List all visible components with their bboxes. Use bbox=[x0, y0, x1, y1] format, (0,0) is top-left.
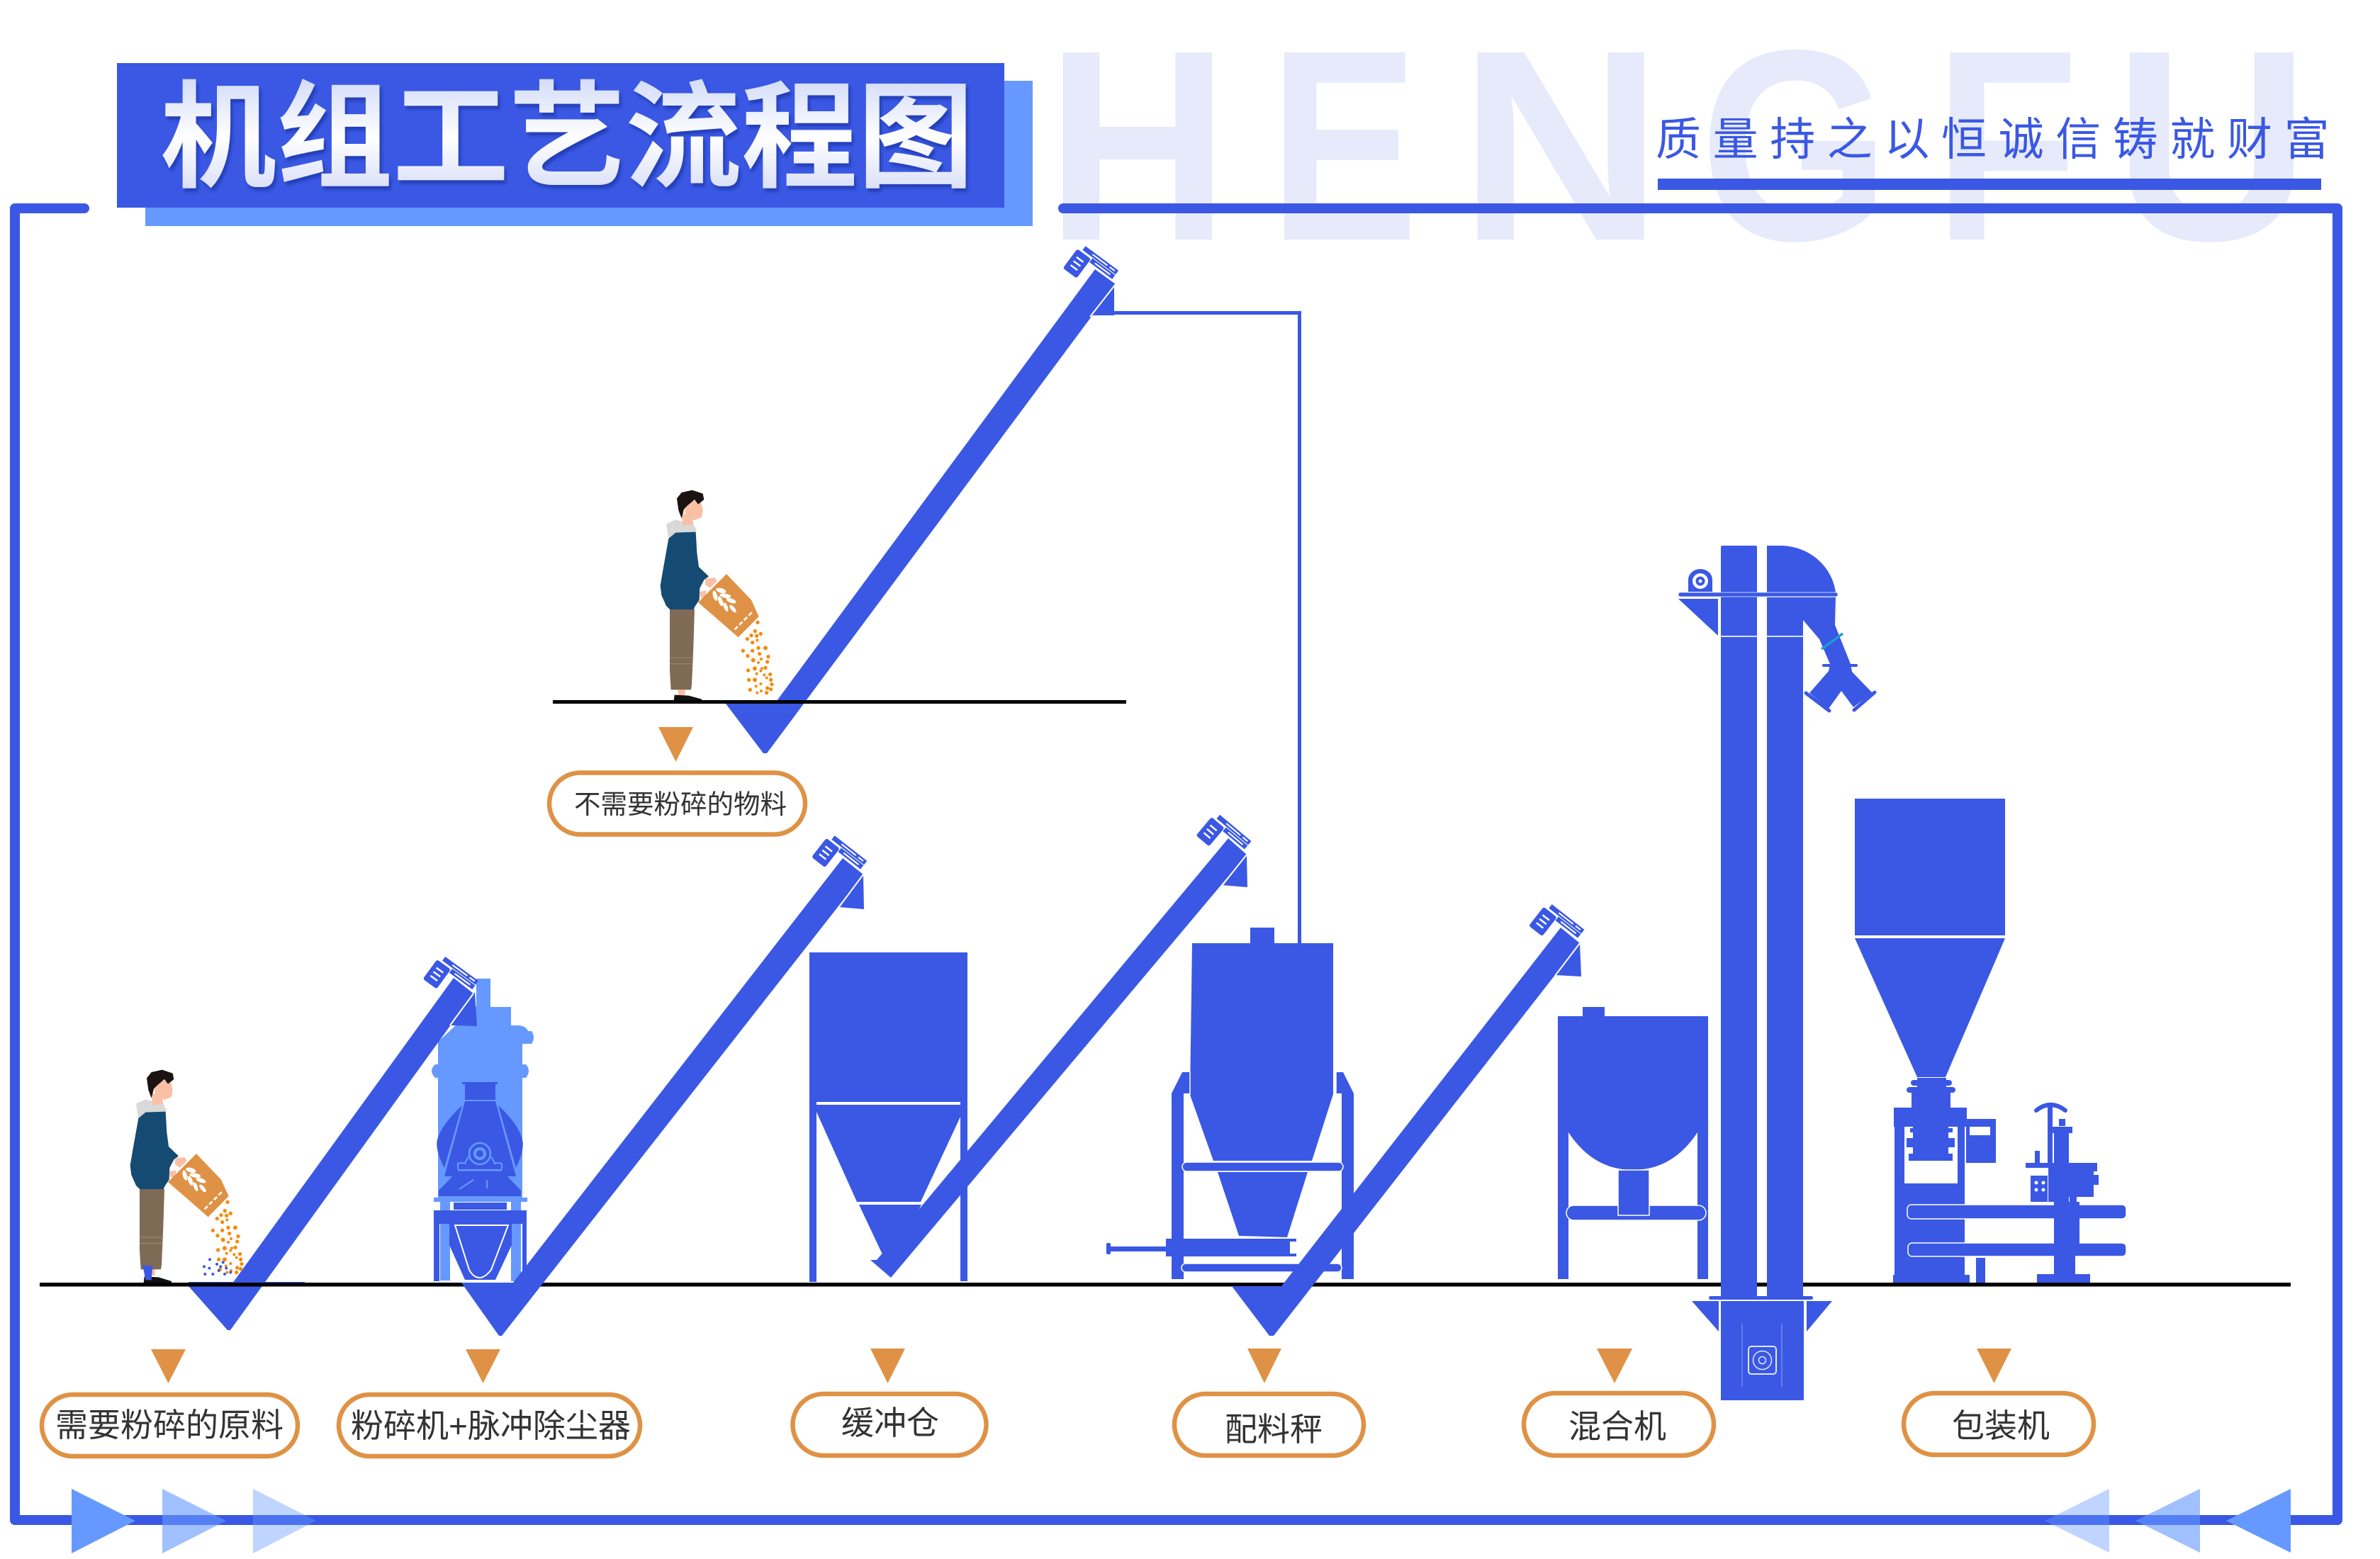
watermark: HENGFU: E bbox=[1269, 0, 1418, 298]
label: raw material needing crushing: 需要粉碎的原料 bbox=[55, 1407, 284, 1443]
feed pipe to batching scale bbox=[1114, 313, 1300, 944]
label: buffer silo: 缓冲仓 bbox=[841, 1405, 939, 1441]
label: material not needing crushing bbox=[549, 727, 805, 835]
packing machine bbox=[1855, 799, 2126, 1283]
tagline: 质量持之以恒诚信铸就财富 bbox=[1656, 114, 2341, 165]
conveyor head bbox=[423, 954, 478, 1006]
label: pulverizer and pulse dust collector: 粉碎机+脉冲除尘器 bbox=[351, 1407, 631, 1444]
conveyor head bbox=[1196, 811, 1252, 865]
ground line: upper bbox=[553, 700, 1126, 704]
watermark: HENGFU: U bbox=[2114, 0, 2310, 298]
label: batching scale: 配料秤 bbox=[1225, 1411, 1323, 1448]
ground line: main bbox=[40, 1283, 2291, 1287]
flow arrows: bottom right bbox=[2045, 1489, 2291, 1553]
screw conveyor 4 bbox=[1232, 901, 1584, 1336]
watermark: HENGFU bbox=[1046, 0, 2310, 298]
title: 机组工艺流程图 bbox=[160, 73, 974, 203]
watermark: HENGFU: G bbox=[1700, 0, 1890, 298]
title banner bbox=[117, 63, 1033, 226]
conveyor head bbox=[812, 833, 867, 885]
tagline bbox=[1656, 114, 2341, 190]
pulverizer with pulse dust collector bbox=[432, 979, 534, 1281]
label: packing machine bbox=[1904, 1349, 2094, 1455]
flow arrows: bottom left bbox=[72, 1489, 316, 1553]
label: mixer: 混合机 bbox=[1568, 1408, 1666, 1445]
label: batching scale bbox=[1174, 1349, 1364, 1456]
conveyor head bbox=[1063, 243, 1118, 296]
label: packing machine: 包装机 bbox=[1952, 1407, 2050, 1444]
conveyor head bbox=[1529, 901, 1584, 954]
watermark: HENGFU: N bbox=[1459, 0, 1663, 298]
label: material not needing crushing: 不需要粉碎的物料 bbox=[574, 789, 787, 819]
label: pulverizer and pulse dust collector bbox=[339, 1349, 640, 1456]
batching scale bbox=[1106, 928, 1354, 1279]
watermark: HENGFU: F bbox=[1934, 0, 2079, 298]
worker pouring material: upper bbox=[661, 490, 773, 700]
label: raw material needing crushing bbox=[42, 1349, 298, 1456]
buffer silo bbox=[809, 952, 967, 1282]
bucket elevator bbox=[1678, 546, 1875, 1400]
screw conveyor 3 bbox=[870, 811, 1252, 1278]
watermark: HENGFU: H bbox=[1046, 0, 1229, 298]
worker pouring material: lower bbox=[130, 1070, 243, 1283]
screw conveyor 2 bbox=[461, 833, 867, 1336]
label: buffer silo bbox=[792, 1349, 987, 1456]
screw conveyor 1 bbox=[189, 954, 478, 1330]
label: mixer bbox=[1524, 1349, 1714, 1456]
mixer bbox=[1558, 1007, 1708, 1279]
screw conveyor: upper bbox=[726, 243, 1118, 753]
elevator motor icon bbox=[1742, 1324, 1782, 1387]
